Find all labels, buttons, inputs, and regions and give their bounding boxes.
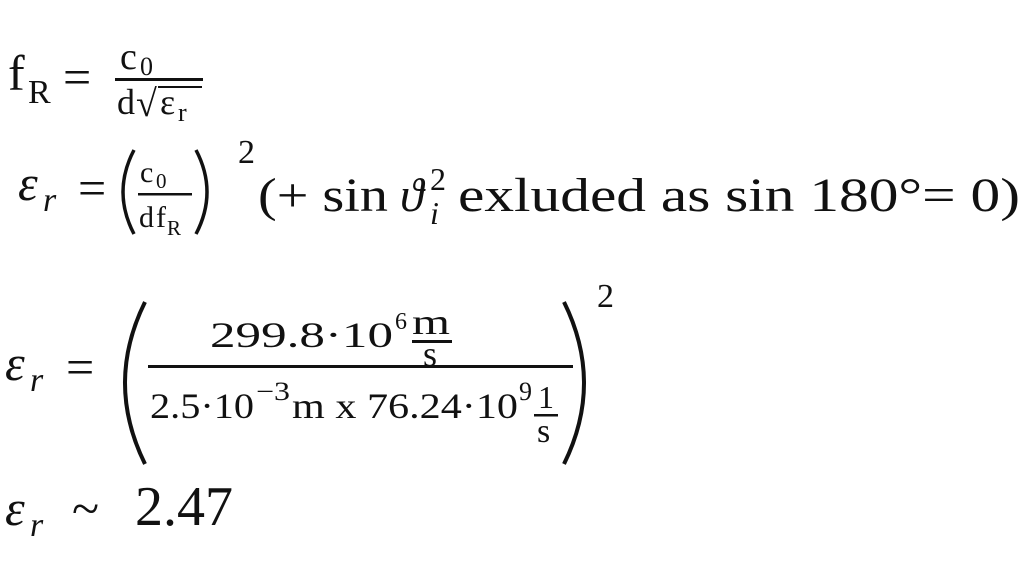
equation 4: result: r bbox=[30, 507, 44, 544]
equation 4: result: 2.47 bbox=[135, 476, 233, 538]
equation 2: permittivity formula: 2 bbox=[238, 134, 255, 171]
equation 3: numeric substitution: m x 76.24·10 bbox=[292, 386, 518, 426]
equation 3: numeric substitution: m bbox=[412, 302, 450, 342]
equation 2: permittivity formula: (+ sin bbox=[258, 169, 388, 222]
equation 3: numeric substitution: 1 bbox=[538, 379, 554, 415]
equation 3: numeric substitution: s bbox=[423, 334, 437, 374]
equation 2: permittivity formula: r bbox=[43, 182, 57, 219]
equation 3: numeric substitution: = bbox=[66, 339, 94, 395]
equation 3: numeric substitution: 6 bbox=[395, 309, 407, 335]
equation 3: numeric substitution: ε bbox=[5, 335, 25, 391]
equation 2: permittivity formula: R bbox=[167, 216, 181, 240]
equation 2: permittivity formula: = bbox=[78, 160, 106, 216]
equation 1: resonance frequency: ε bbox=[160, 82, 175, 122]
equation 2: permittivity formula: d bbox=[139, 201, 154, 234]
equation 4: result: ~ bbox=[72, 480, 99, 536]
equation 3: numeric substitution: 299.8·10 bbox=[210, 315, 393, 355]
equation 3: numeric substitution: −3 bbox=[256, 377, 290, 406]
equation 1: resonance frequency: d bbox=[117, 82, 135, 122]
equation 3: numeric substitution: s bbox=[537, 413, 550, 450]
equation 3: numeric substitution: 9 bbox=[519, 377, 532, 406]
equation 1: resonance frequency: 0 bbox=[140, 52, 153, 81]
equation 1: resonance frequency: R bbox=[28, 74, 51, 111]
equation 2: permittivity formula: c bbox=[140, 156, 153, 189]
equation 4: result: ε bbox=[5, 480, 25, 536]
equation 4: result bbox=[5, 476, 233, 544]
equation 1: resonance frequency: c bbox=[120, 36, 137, 78]
equation 1: resonance frequency: f bbox=[8, 45, 25, 101]
equation 3: numeric substitution: r bbox=[30, 362, 44, 399]
equation 2: permittivity formula: 0 bbox=[156, 169, 166, 193]
equation 3: numeric substitution: 2 bbox=[597, 278, 614, 315]
equation 2: permittivity formula: ϑ bbox=[400, 169, 426, 222]
equation 1: resonance frequency: r bbox=[178, 98, 187, 127]
equation 2: permittivity formula: 2 bbox=[430, 161, 446, 197]
equation 1: resonance frequency: = bbox=[63, 49, 91, 105]
equation 2: permittivity formula: ε bbox=[18, 155, 38, 211]
equation 3: numeric substitution: 2.5·10 bbox=[150, 386, 254, 426]
equation 2: permittivity formula: i bbox=[430, 195, 439, 231]
equation 1: resonance frequency bbox=[8, 36, 203, 127]
equation 1: resonance frequency: √ bbox=[136, 83, 157, 125]
equation 2: permittivity formula: f bbox=[156, 201, 166, 234]
equation 3: numeric substitution bbox=[5, 278, 614, 464]
equation 2: permittivity formula: exluded as sin 180°= 0) bbox=[458, 169, 1020, 222]
equation 2: permittivity formula bbox=[18, 134, 1020, 240]
